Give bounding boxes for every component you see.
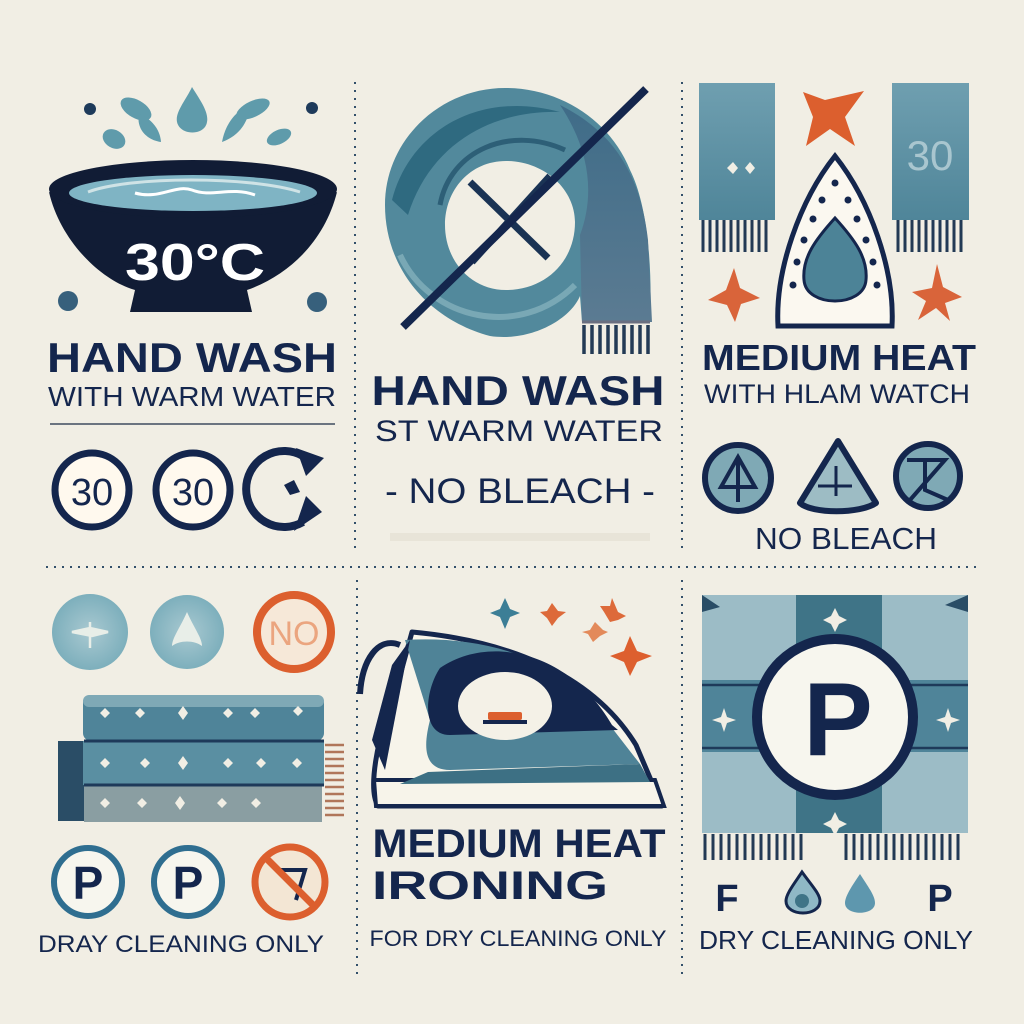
icon: fabric square	[702, 595, 968, 860]
icon: right swatch	[892, 83, 969, 252]
icon: 30 badge one	[55, 453, 129, 527]
icon: P badge one: P	[73, 857, 103, 909]
heading: medium heat: MEDIUM HEAT	[702, 337, 976, 378]
label: no bleach: - NO BLEACH -	[385, 472, 655, 511]
heading: medium heat ironing	[372, 822, 666, 908]
heading: medium heat ironing: MEDIUM HEAT	[372, 822, 666, 866]
icon: right swatch: 30	[907, 132, 953, 179]
icon: no sign orange: NO	[268, 615, 320, 653]
icon: 30 badge two	[156, 453, 230, 527]
panel: iron medium heat	[360, 598, 667, 951]
label: dry cleaning only: DRAY CLEANING ONLY	[38, 931, 324, 958]
panel: scarf no wash	[372, 88, 664, 541]
subheading: warm water: ST WARM WATER	[375, 415, 663, 448]
icon: orange star top	[803, 91, 864, 146]
icon: wash bowl	[49, 160, 337, 312]
icon: twisted scarf	[385, 88, 652, 354]
icon: P badge two	[154, 848, 222, 916]
icon: cross mark	[470, 176, 550, 262]
panel: dry cleaning P	[699, 595, 973, 955]
heading: hand wash: HAND WASH	[372, 367, 664, 414]
label: for dry cleaning only: FOR DRY CLEANING ONLY	[370, 926, 667, 951]
icon: large P circle: P	[803, 662, 873, 778]
panel: stacked fabric	[38, 594, 344, 958]
icon: orange star left	[708, 268, 760, 322]
icon: 30 badge one: 30	[71, 472, 113, 514]
icon: pale circle	[52, 594, 128, 670]
icon: no sign orange	[257, 595, 331, 669]
icon: water droplets	[84, 87, 318, 153]
heading: hand wash: HAND WASH	[47, 334, 337, 381]
icon: sparkles	[490, 598, 652, 676]
label: no bleach: NO BLEACH	[755, 521, 937, 556]
icon: prohibition slash	[403, 89, 646, 327]
icon: care triangle	[800, 441, 876, 511]
icon: 30 badge two: 30	[172, 472, 214, 514]
icon: large P circle	[757, 639, 913, 795]
icon: steam iron	[360, 632, 664, 806]
icon: iron soleplate	[778, 156, 892, 326]
icon: drop badge one	[786, 872, 820, 913]
icon: P badge two: P	[173, 857, 203, 909]
panel: hand wash 30C	[47, 87, 337, 531]
icon: drop two	[845, 874, 875, 913]
icon: left swatch	[699, 83, 775, 252]
icon: letter P: P	[927, 878, 953, 920]
subheading: warm water: WITH WARM WATER	[48, 381, 336, 412]
icon: letter F: F	[715, 878, 739, 920]
label: dry cleaning only: DRY CLEANING ONLY	[699, 925, 973, 955]
icon: folded fabric stack	[58, 695, 344, 822]
icon: care badge crossed	[896, 444, 960, 508]
icon: no symbol	[255, 847, 325, 917]
icon: P badge one	[54, 848, 122, 916]
icon: water circle	[150, 595, 224, 669]
icon: care badge one	[705, 445, 771, 511]
panel: medium heat iron	[699, 83, 976, 556]
bowl temperature label: 30°C	[125, 234, 265, 292]
icon: broken C badge	[246, 448, 324, 531]
subheading: garbled: WITH HLAM WATCH	[704, 379, 970, 409]
heading: medium heat ironing: IRONING	[372, 864, 608, 908]
icon: orange star right	[912, 264, 962, 321]
